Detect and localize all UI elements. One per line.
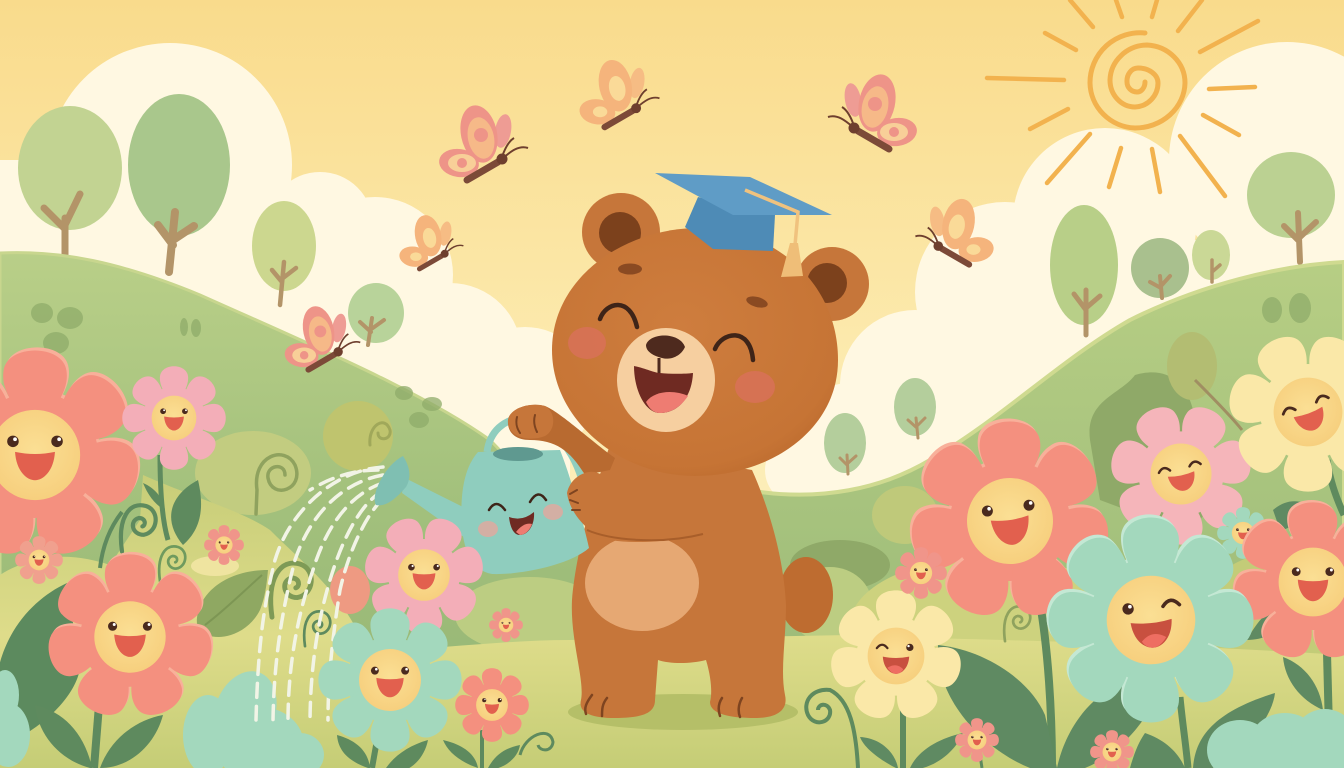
flower: left stems and leaves: [35, 455, 553, 768]
can body: [461, 450, 589, 574]
cap base: [685, 197, 775, 251]
clouds right: [765, 42, 1344, 510]
bear mouth: [634, 358, 693, 413]
graduation cap: [655, 173, 832, 277]
flower: yellow top right: [1225, 330, 1344, 492]
butterfly: lower left: [283, 303, 360, 370]
bear body and legs: [572, 445, 786, 718]
bear head: [552, 228, 838, 476]
trees right: [824, 152, 1335, 474]
flower: tiny salmon middle: [204, 525, 244, 565]
trees left: [18, 94, 404, 345]
bear nose: [646, 335, 685, 359]
watering can: [375, 418, 589, 574]
flower: tiny salmon centre: [489, 608, 523, 642]
butterfly: top centre: [578, 57, 660, 127]
bear ear left: [582, 193, 660, 271]
flower: big salmon left: [0, 347, 146, 563]
bear muzzle: [617, 328, 715, 432]
butterfly: upper left: [437, 102, 528, 180]
teal bush bottom right: [1207, 709, 1344, 768]
bear shadow: [568, 694, 798, 730]
bear arm upper: [508, 405, 615, 475]
bear: [375, 173, 869, 718]
hill right: [760, 262, 1344, 768]
bear arm lower: [567, 472, 740, 542]
flower: small teal right: [1217, 507, 1269, 559]
can opening: [493, 447, 543, 461]
flower: pink right: [1107, 401, 1255, 545]
flower: tiny salmon right: [895, 547, 947, 599]
cap tassel: [745, 190, 803, 277]
butterfly: upper right: [828, 71, 919, 149]
butterfly: right: [915, 196, 995, 265]
flower stems right: [806, 460, 1344, 768]
flower: tiny salmon left: [15, 536, 63, 584]
bear paw upper: [508, 405, 553, 439]
left meadow plants: [0, 505, 370, 750]
bear belly: [585, 535, 699, 631]
bear cheeks: [568, 327, 775, 403]
flower: tiny salmon bottom far right: [1090, 730, 1134, 768]
clouds left: [0, 43, 593, 515]
flower: big teal right: [1046, 514, 1253, 722]
flower: small salmon bottom: [455, 668, 529, 742]
flower: yellow centre right: [828, 590, 964, 724]
flower: tiny salmon bottom right: [955, 718, 999, 762]
bushes right: [790, 332, 1242, 590]
cap board: [655, 173, 832, 215]
can handle: [487, 418, 582, 480]
can rose: [375, 456, 409, 505]
flower: pink upper left: [122, 366, 226, 470]
sun: [987, 0, 1258, 196]
bear eyes: [600, 305, 753, 360]
spiral right: [1004, 606, 1030, 641]
flower: salmon lower left: [44, 552, 218, 722]
bear tail: [779, 557, 833, 633]
bear ear right: [795, 247, 869, 321]
bear feet toes: [585, 695, 742, 717]
teal bush bottom left: [0, 662, 324, 768]
mid mounds: [455, 550, 1344, 750]
flower: teal centre: [318, 608, 462, 752]
hill left: [0, 253, 770, 768]
hill spots: [31, 293, 1311, 428]
ground: [0, 475, 1344, 768]
flower: pink centre: [362, 513, 486, 635]
flower: salmon far right: [1228, 500, 1344, 664]
bear eyebrows: [618, 264, 769, 310]
butterfly: middle left: [398, 213, 463, 269]
bushes left: [195, 401, 393, 515]
water stream: [256, 467, 383, 725]
flower: big salmon right: [904, 418, 1114, 624]
can spout: [402, 478, 468, 540]
can face: [478, 494, 563, 537]
